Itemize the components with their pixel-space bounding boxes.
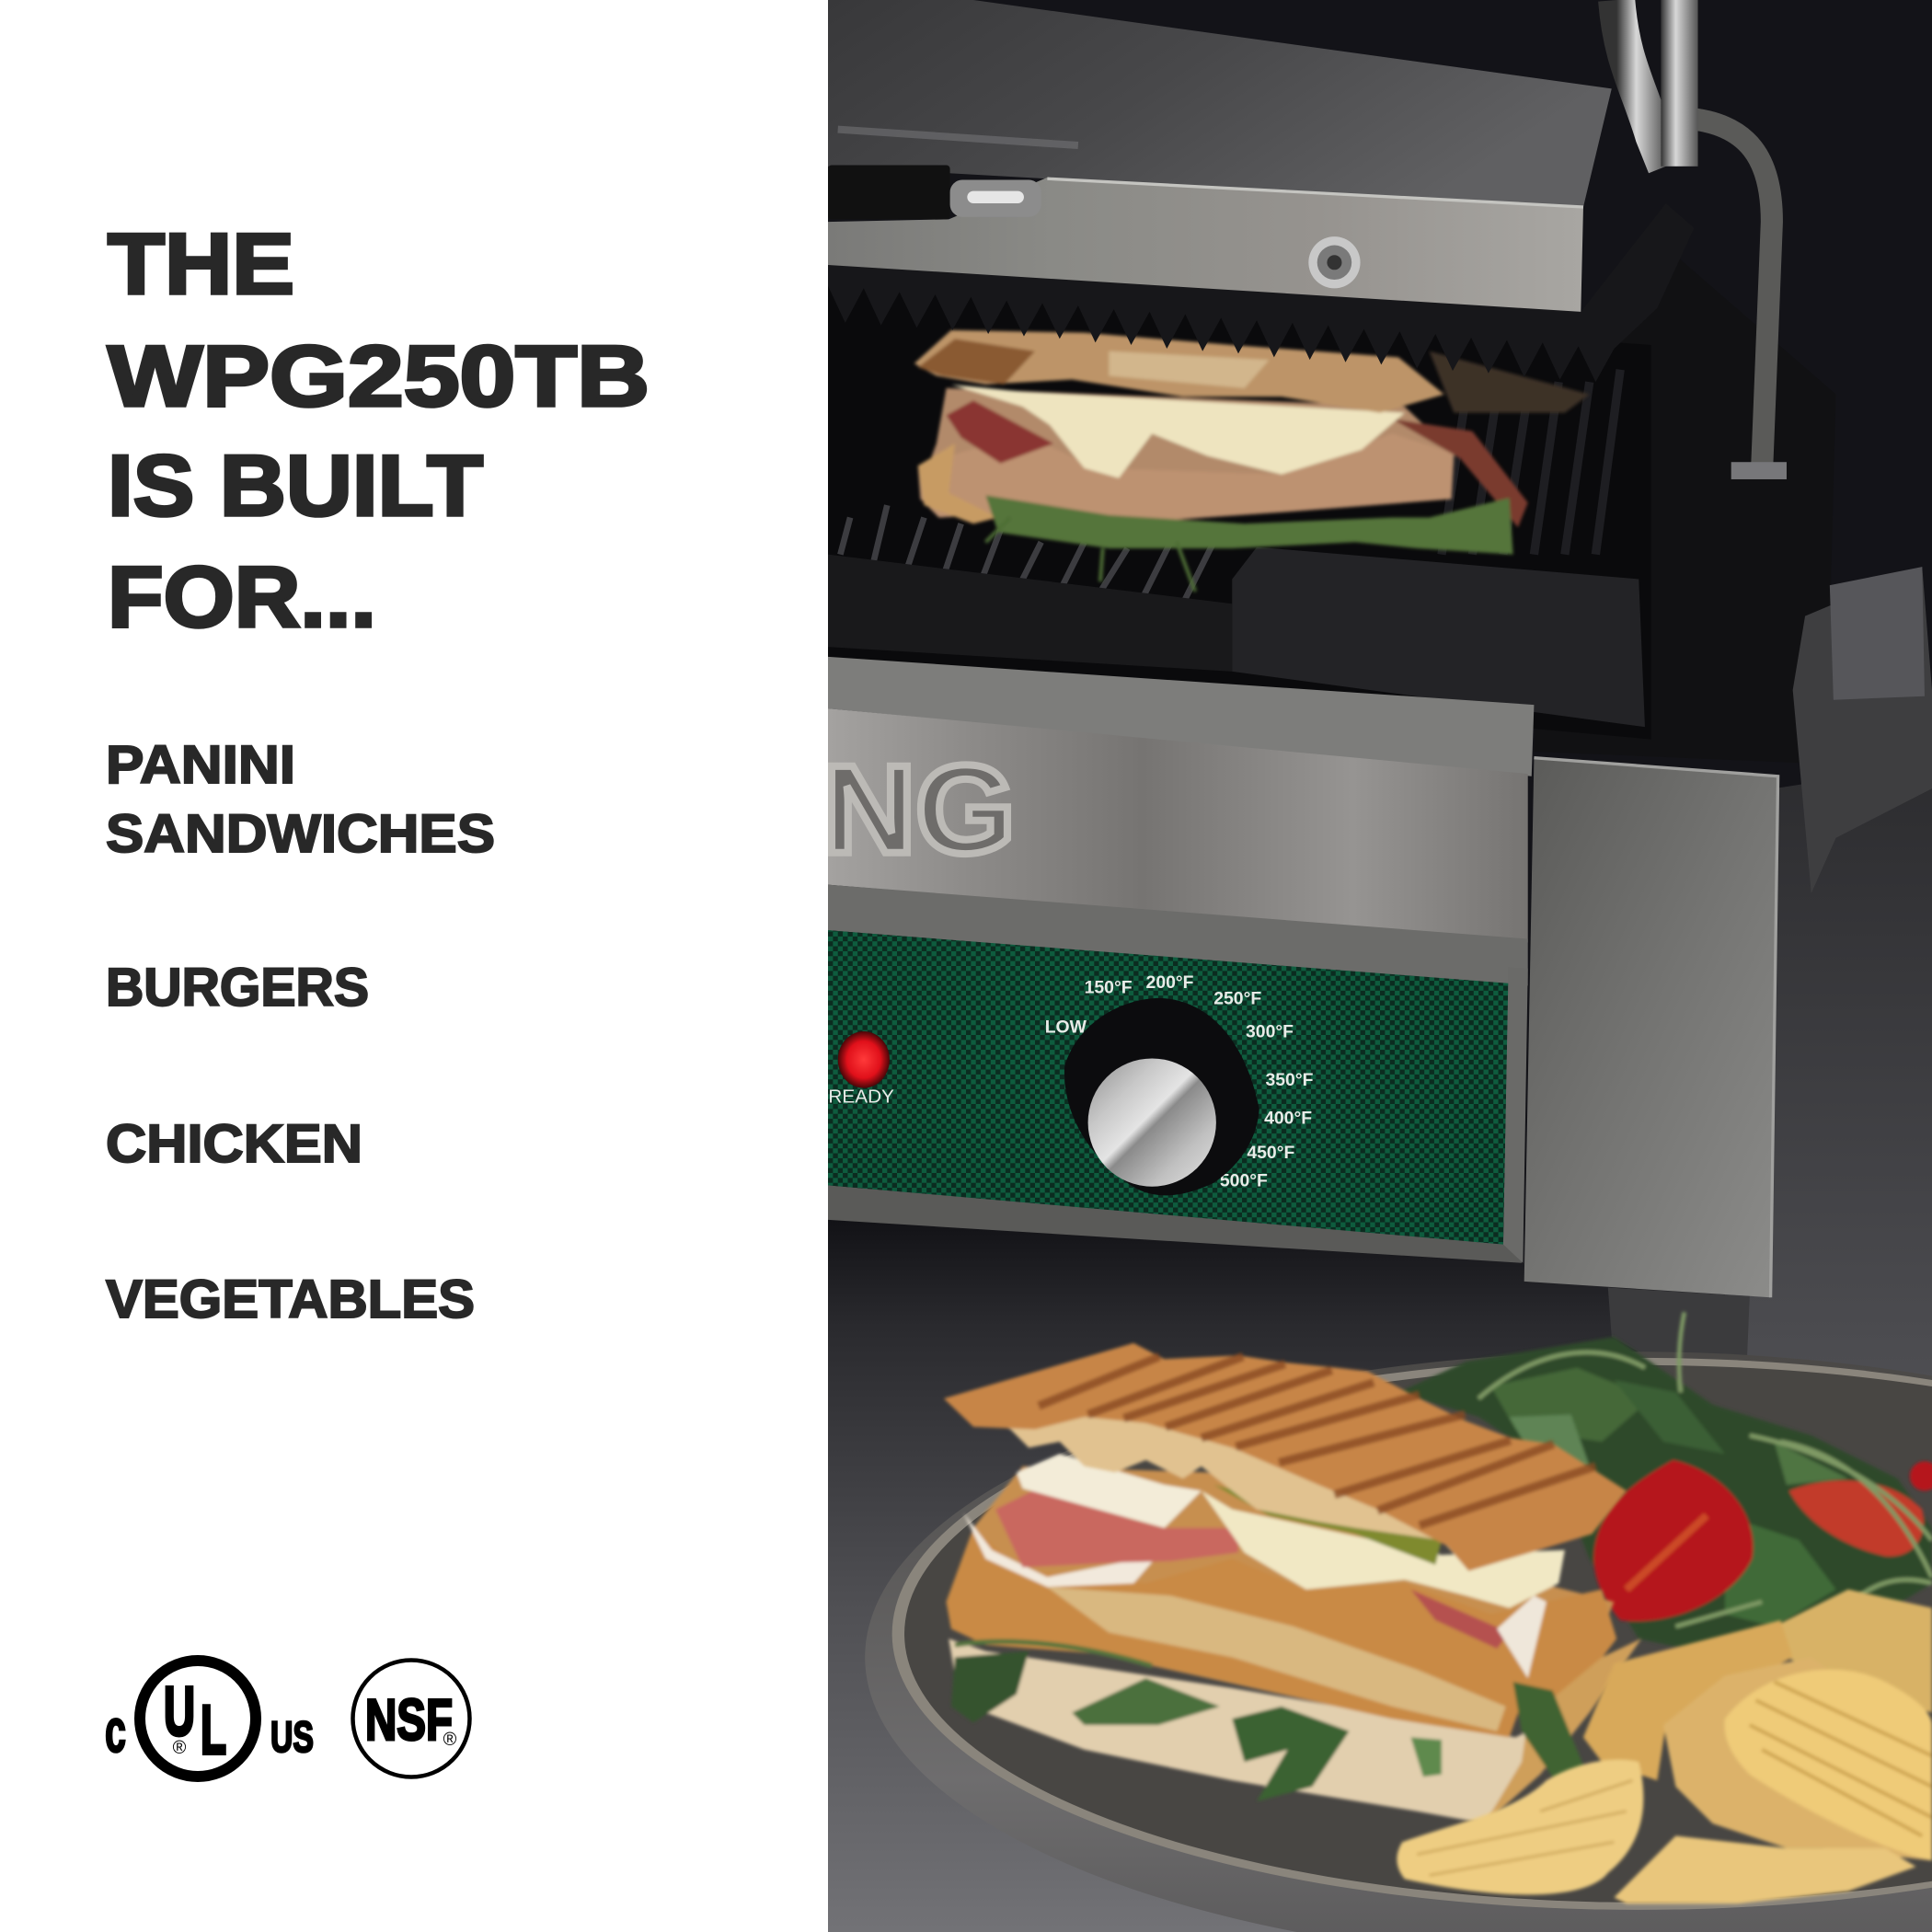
greens under sandwich xyxy=(985,495,1513,555)
hinge arm xyxy=(1685,119,1772,468)
handle bracket xyxy=(950,180,1041,217)
icon: cULus certification mark: ® xyxy=(173,1738,187,1758)
stainless front body xyxy=(823,657,1534,1263)
toasted top xyxy=(944,1343,1627,1571)
temperature scale xyxy=(1045,972,1314,1191)
cheese right xyxy=(1497,1595,1547,1678)
icon: cULus certification mark: U xyxy=(164,1673,195,1750)
front top strip xyxy=(828,657,1534,776)
list item: panini sandwiches xyxy=(106,735,495,864)
front face xyxy=(828,708,1528,943)
control panel xyxy=(828,930,1508,1245)
prosciutto xyxy=(995,1478,1238,1568)
fat xyxy=(963,1513,1158,1587)
grill side panel xyxy=(1524,758,1778,1297)
chip front ridges xyxy=(1750,1682,1932,1836)
top bread xyxy=(914,330,1444,413)
sandwich inside grill xyxy=(914,330,1590,592)
chicken cutlet xyxy=(947,1528,1616,1737)
handle grip xyxy=(828,165,950,219)
grill lid top face xyxy=(828,0,1612,207)
right trim xyxy=(1503,967,1528,1263)
temperature scale: 500°F xyxy=(1220,1171,1268,1191)
salad xyxy=(1398,1312,1932,1657)
lid reflection marks xyxy=(838,130,1078,145)
list item: vegetables: VEGETABLES xyxy=(106,1270,475,1329)
title: FOR... xyxy=(108,548,376,645)
icon: NSF certification mark: ® xyxy=(443,1730,457,1750)
temperature scale: 450°F xyxy=(1247,1143,1294,1163)
right bread crust xyxy=(1485,1639,1641,1823)
grill foot xyxy=(1608,1288,1750,1363)
icon: cULus certification mark xyxy=(105,1661,314,1777)
grill hinge body xyxy=(1534,234,1836,764)
plate xyxy=(865,1351,1932,1932)
ready light: READY xyxy=(828,1087,894,1108)
icon: cULus certification mark: US xyxy=(270,1712,314,1761)
list item: panini sandwiches: SANDWICHES xyxy=(106,804,495,864)
temperature scale: 400°F xyxy=(1264,1108,1312,1128)
mozzarella left xyxy=(1017,1454,1202,1528)
title: THE xyxy=(108,215,294,312)
panel: white text column xyxy=(105,215,650,1782)
potato chips xyxy=(1397,1590,1932,1903)
temperature scale: 300°F xyxy=(1246,1022,1294,1042)
side panel edge xyxy=(1534,758,1778,1297)
food list xyxy=(106,735,495,1329)
title xyxy=(108,215,650,645)
tomato left xyxy=(1593,1460,1754,1621)
bread side xyxy=(951,1392,1478,1571)
chip bottom ridges xyxy=(1417,1780,1633,1875)
icon: cULus certification mark: L xyxy=(201,1691,226,1768)
temperature scale: 150°F xyxy=(1085,977,1133,997)
toasted spot xyxy=(918,339,1035,385)
lid front lip xyxy=(828,178,1583,312)
prosciutto xyxy=(947,400,1053,464)
steel counter xyxy=(828,764,1932,1932)
ready light xyxy=(828,1031,894,1108)
salad leaves xyxy=(1398,1337,1932,1657)
lip highlight xyxy=(1047,178,1583,207)
hinge collar xyxy=(1731,462,1787,479)
mozzarella right xyxy=(1202,1491,1565,1608)
tomato edge xyxy=(1910,1461,1932,1491)
control knob xyxy=(1064,998,1259,1195)
temperature scale: 350°F xyxy=(1265,1070,1314,1090)
list item: chicken: CHICKEN xyxy=(106,1114,362,1174)
tomato right xyxy=(1789,1480,1924,1557)
ham right xyxy=(1410,1590,1510,1649)
bread crumb xyxy=(1109,351,1269,388)
temperature scale: 200°F xyxy=(1146,972,1194,993)
lower trim xyxy=(828,1185,1522,1263)
upper grill plate with teeth xyxy=(828,203,1695,382)
sandwich filling base xyxy=(947,1466,1614,1719)
trim strip xyxy=(828,885,1528,985)
panini on plate xyxy=(944,1343,1641,1823)
handle post xyxy=(1661,0,1698,167)
icon: cULus certification mark: c xyxy=(105,1696,126,1765)
embossed brand: NG xyxy=(828,739,1016,880)
arugula stems xyxy=(1478,1312,1932,1627)
chip upper xyxy=(1583,1620,1793,1780)
icon: NSF certification mark: NSF xyxy=(365,1688,453,1753)
grill marks xyxy=(1039,1357,1595,1525)
crust lower bread xyxy=(918,443,998,523)
icon: NSF certification mark xyxy=(353,1660,469,1777)
lower grill interior xyxy=(828,283,1651,740)
chip back right xyxy=(1775,1590,1932,1713)
latch highlight xyxy=(1830,567,1925,700)
title: WPG250TB xyxy=(108,328,650,424)
list item: panini sandwiches: PANINI xyxy=(106,735,295,795)
chip middle xyxy=(1663,1657,1932,1860)
shadowed back bread xyxy=(1430,351,1590,413)
chip front large xyxy=(1725,1670,1932,1860)
temperature scale: LOW xyxy=(1045,1017,1087,1037)
list item: burgers: BURGERS xyxy=(106,958,369,1018)
side latch bracket xyxy=(1793,567,1932,893)
cutlet glaze xyxy=(1047,1587,1506,1731)
sandwich base fill xyxy=(920,388,1454,520)
pesto xyxy=(1213,1485,1442,1565)
chip bottom left xyxy=(1397,1760,1643,1894)
screw xyxy=(1308,236,1361,288)
title: IS BUILT xyxy=(108,437,483,534)
arugula in sandwich xyxy=(951,1651,1029,1722)
temperature scale: 250°F xyxy=(1213,989,1261,1009)
right ham xyxy=(1392,419,1528,527)
dark backdrop xyxy=(828,0,1932,1232)
photo: panini grill with finished sandwich xyxy=(828,0,1932,1932)
chrome handle xyxy=(1616,0,1666,167)
chip bottom right xyxy=(1614,1836,1916,1903)
chicken layer xyxy=(918,433,1454,520)
sprig xyxy=(985,517,1195,592)
lower bread xyxy=(949,1639,1641,1823)
cheese xyxy=(951,385,1405,478)
